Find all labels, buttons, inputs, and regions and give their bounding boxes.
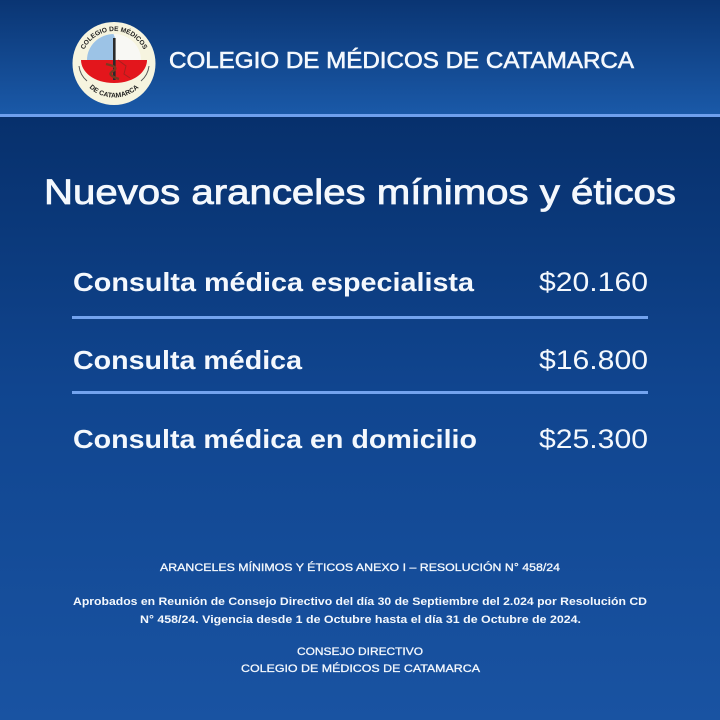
- price row: domicilio: Consulta médica en domicilio: [73, 424, 477, 454]
- logo ring text: top: COLEGIO DE MÉDICOS: [81, 26, 148, 49]
- footer text block: [73, 561, 647, 675]
- price row: consulta medica: $16.800: [539, 345, 648, 375]
- approval line 1: Aprobados en Reunión de Consejo Directivo del día 30 de Septiembre del 2.024 por Resolución CD: [73, 596, 647, 608]
- price row: consulta medica: [73, 345, 648, 375]
- approval line 2: N° 458/24. Vigencia desde 1 de Octubre hasta el día 31 de Octubre de 2024.: [140, 614, 581, 626]
- main heading: Nuevos aranceles mínimos y éticos: [44, 173, 676, 212]
- annex heading: ARANCELES MÍNIMOS Y ÉTICOS ANEXO I – RESOLUCIÓN N° 458/24: [160, 561, 560, 574]
- price row: domicilio: $25.300: [539, 424, 648, 454]
- price row: consulta medica: Consulta médica: [73, 345, 303, 375]
- logo ring text: bottom: DE CATAMARCA: [90, 84, 139, 98]
- signature line 2: COLEGIO DE MÉDICOS DE CATAMARCA: [241, 662, 481, 675]
- price row: especialista: Consulta médica especialista: [73, 267, 475, 297]
- header title: COLEGIO DE MÉDICOS DE CATAMARCA: [169, 47, 635, 73]
- header divider line: [0, 114, 720, 117]
- panel: header band: [0, 0, 720, 114]
- row divider 1: [72, 316, 648, 319]
- row divider 2: [72, 391, 648, 394]
- price row: especialista: $20.160: [539, 267, 648, 297]
- signature line 1: CONSEJO DIRECTIVO: [297, 646, 423, 658]
- price row: domicilio: [73, 424, 648, 454]
- price row: especialista: [73, 267, 648, 297]
- icon: association logo: [72, 22, 156, 105]
